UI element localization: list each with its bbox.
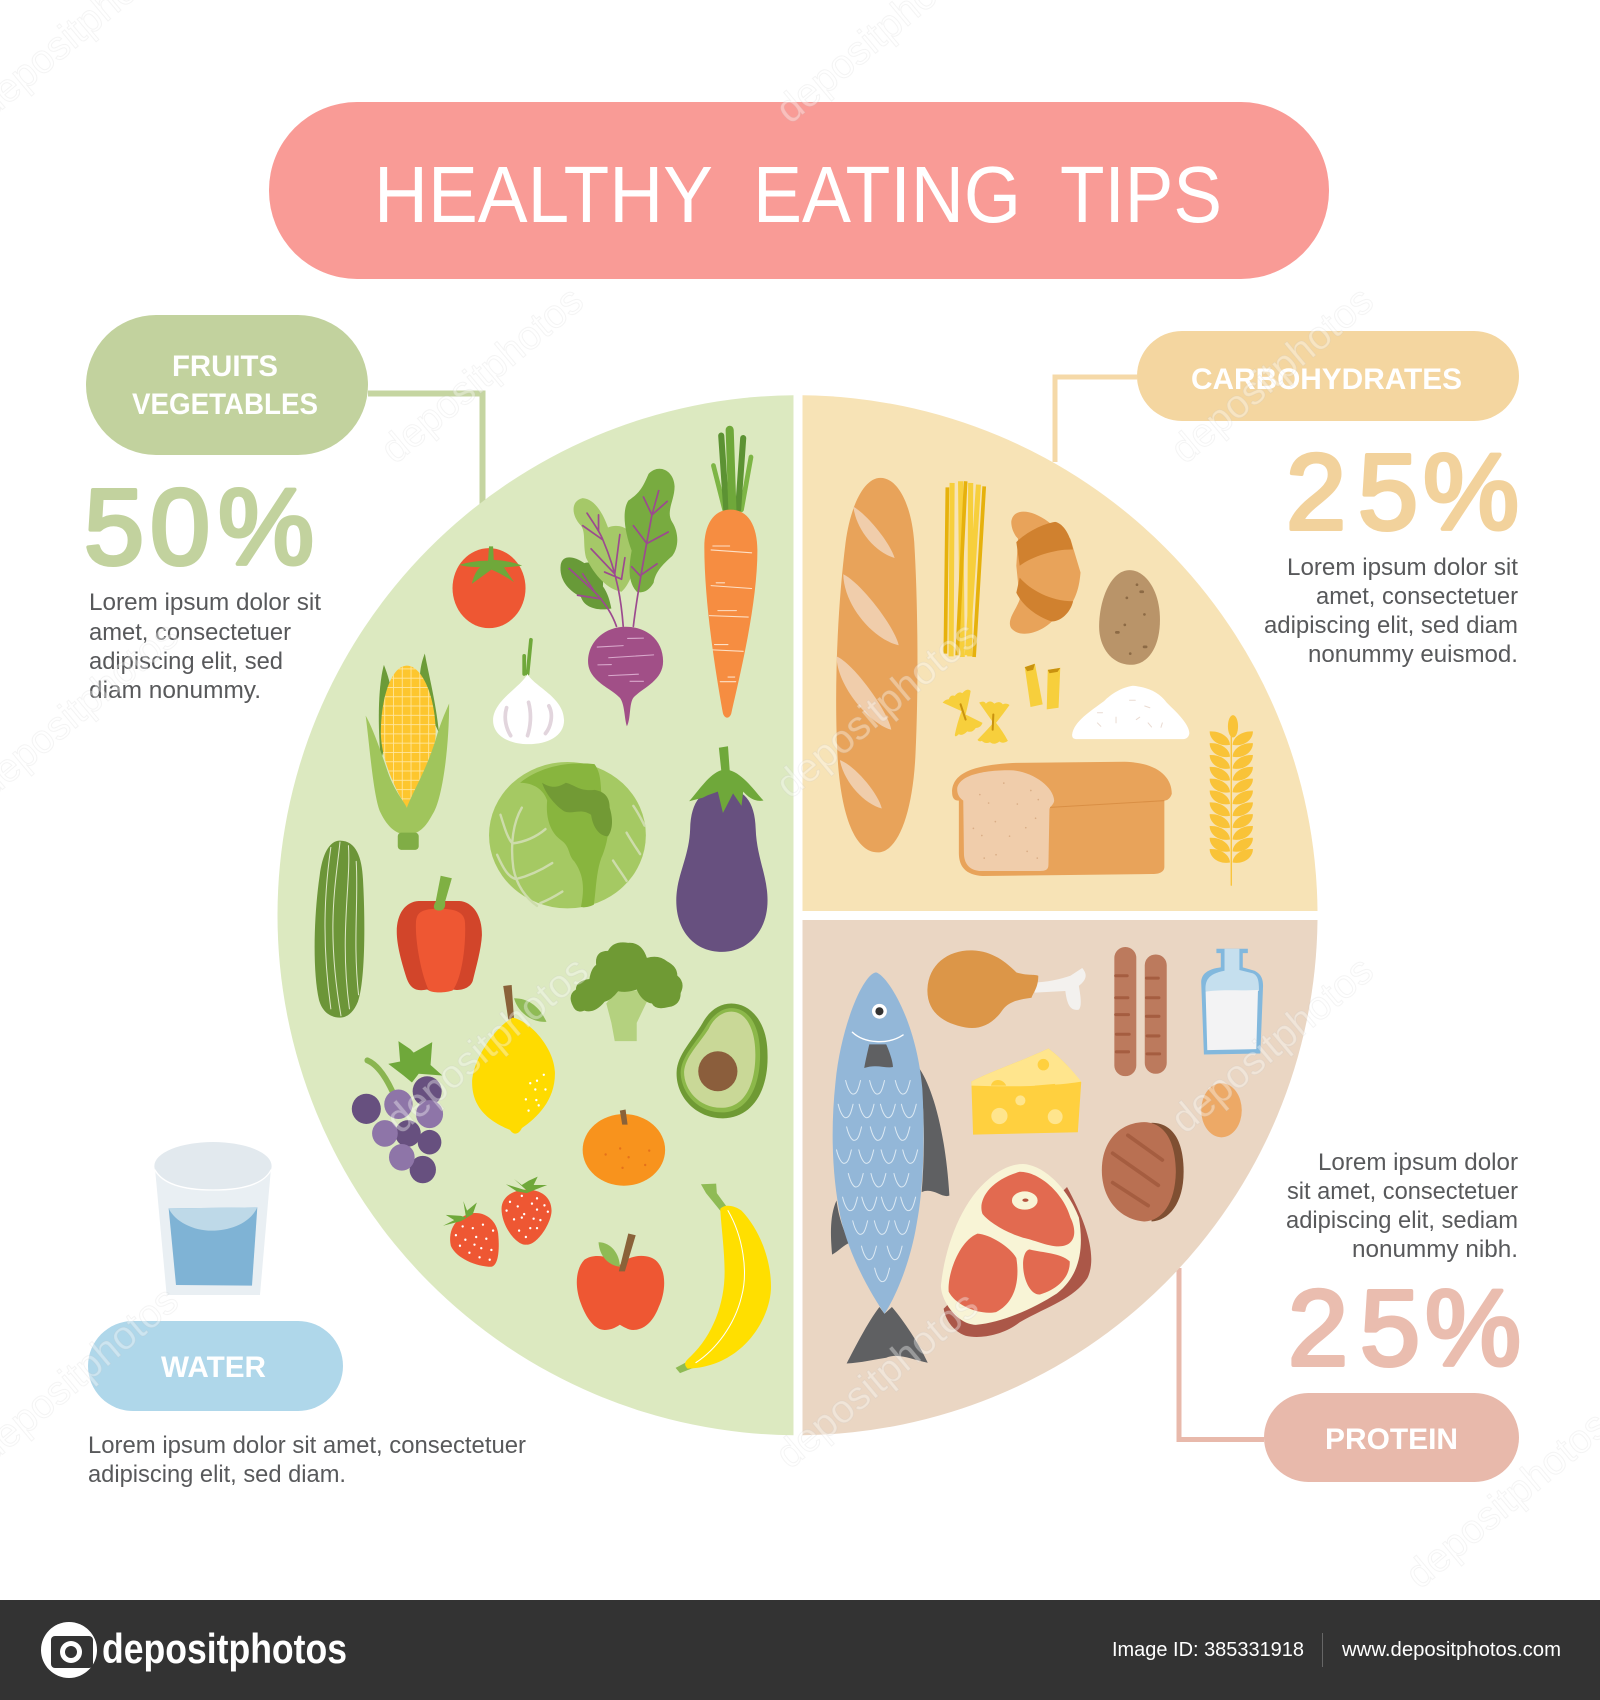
connector: protein: [1179, 1268, 1264, 1440]
icon: sausages: [1114, 947, 1167, 1076]
watermarks: depositphotos: [1163, 948, 1382, 1142]
text: fruits vegetables description: amet, consectetuer: [89, 619, 291, 646]
text: fruits vegetables description: Lorem ipsum dolor sit: [89, 589, 321, 616]
panel: plate half fruits and vegetables: [278, 395, 794, 1435]
vegetables upper group: [366, 430, 768, 952]
icon: cabbage: [489, 762, 646, 908]
watermarks: depositphotos: [768, 1283, 987, 1477]
text: carbohydrates description: [1264, 554, 1518, 668]
footer image id: Image ID: 385331918: [1112, 1639, 1304, 1661]
connector: carbohydrates: [1055, 377, 1137, 462]
footer logo text: depositphotos: [102, 1625, 347, 1672]
title banner: TIPS: [1060, 150, 1222, 239]
icon: croissant: [1010, 512, 1081, 634]
icon: loaf of bread: [952, 762, 1172, 876]
footer url: www.depositphotos.com: [1341, 1639, 1561, 1661]
text: protein description: nonummy nibh.: [1352, 1236, 1518, 1263]
icon: spaghetti: [945, 481, 984, 657]
footer bar: [0, 1600, 1600, 1700]
icon: broccoli: [571, 942, 683, 1041]
protein food group: [831, 947, 1263, 1363]
pill: protein: [1264, 1393, 1519, 1482]
carbohydrates food group: [836, 478, 1253, 885]
icon: lemon: [472, 985, 555, 1134]
pill: carbohydrates: [1137, 331, 1519, 421]
icon: tomato: [453, 546, 526, 628]
text: carbohydrates description: amet, consectetuer: [1316, 583, 1518, 610]
pill: carbohydrates: CARBOHYDRATES: [1191, 363, 1462, 396]
icon: beetroot: [560, 469, 677, 726]
icon: rice: [1072, 686, 1189, 739]
icon: steak: [941, 1164, 1091, 1337]
icon: milk bottle: [1201, 949, 1263, 1055]
icon: cheese: [971, 1048, 1081, 1135]
text: carbohydrates description: nonummy euismod.: [1308, 641, 1518, 668]
connector: fruits vegetables: [368, 394, 482, 510]
icon: fish: [831, 972, 949, 1363]
stat: carbohydrates 25 percent: 25%: [1286, 431, 1519, 552]
icon: avocado: [677, 1004, 768, 1118]
icon: egg: [1201, 1083, 1242, 1137]
icon: potato: [1099, 570, 1160, 665]
icon: farfalle: [943, 690, 1010, 744]
icon: burger patty: [1102, 1122, 1184, 1221]
icon: cucumber: [315, 841, 364, 1018]
vegetables and fruit lower group: [315, 841, 771, 1373]
text: protein description: Lorem ipsum dolor: [1318, 1149, 1518, 1176]
icon: chicken leg: [927, 950, 1086, 1028]
watermarks: depositphotos: [378, 948, 597, 1142]
panel: plate quarter protein: [802, 920, 1318, 1435]
pill: water: [88, 1321, 343, 1411]
icon: apple: [577, 1233, 664, 1330]
text: carbohydrates description: Lorem ipsum dolor sit: [1287, 554, 1518, 581]
icon: wheat: [1210, 715, 1253, 885]
icon: glass of water: [154, 1142, 272, 1295]
text: fruits vegetables description: adipiscing elit, sed: [89, 648, 283, 675]
text: fruits vegetables description: diam nonummy.: [89, 677, 261, 704]
icon: corn: [366, 653, 449, 850]
icon: grapes: [352, 1041, 443, 1183]
watermarks: depositphotos: [373, 278, 592, 472]
pill: protein: PROTEIN: [1325, 1423, 1458, 1456]
text: water description: [88, 1432, 526, 1488]
icon: orange: [583, 1110, 665, 1186]
watermarks: depositphotos: [768, 613, 987, 807]
text: protein description: adipiscing elit, sediam: [1286, 1207, 1518, 1234]
text: protein description: sit amet, consectetuer: [1287, 1178, 1518, 1205]
icon: depositphotos logo: [41, 1622, 97, 1678]
title banner: EATING: [753, 150, 1021, 239]
pill: water: WATER: [161, 1351, 266, 1384]
text: fruits vegetables description: [89, 589, 321, 704]
pill: fruits vegetables: VEGETABLES: [132, 388, 318, 421]
icon: eggplant: [676, 746, 768, 952]
pill: fruits vegetables: [86, 315, 368, 455]
panel: plate quarter carbohydrates: [802, 395, 1318, 911]
icon: banana: [676, 1184, 771, 1373]
title banner: [269, 102, 1329, 279]
icon: strawberries: [443, 1177, 552, 1267]
text: water description: Lorem ipsum dolor sit amet, consectetuer: [88, 1432, 526, 1459]
watermarks: depositphotos: [1163, 278, 1382, 472]
stat: fruits vegetables 50 percent: 50%: [84, 466, 314, 587]
icon: carrot: [704, 430, 757, 718]
icon: penne: [1025, 664, 1060, 709]
text: carbohydrates description: adipiscing elit, sed diam: [1264, 612, 1518, 639]
text: water description: adipiscing elit, sed diam.: [88, 1461, 346, 1488]
icon: garlic: [493, 640, 564, 744]
icon: bell pepper: [397, 876, 482, 992]
stat: protein 25 percent: 25%: [1288, 1267, 1521, 1388]
pill: fruits vegetables: FRUITS: [172, 350, 278, 383]
icon: baguette: [836, 478, 917, 852]
text: protein description: [1286, 1149, 1518, 1263]
title banner: HEALTHY: [374, 150, 713, 239]
